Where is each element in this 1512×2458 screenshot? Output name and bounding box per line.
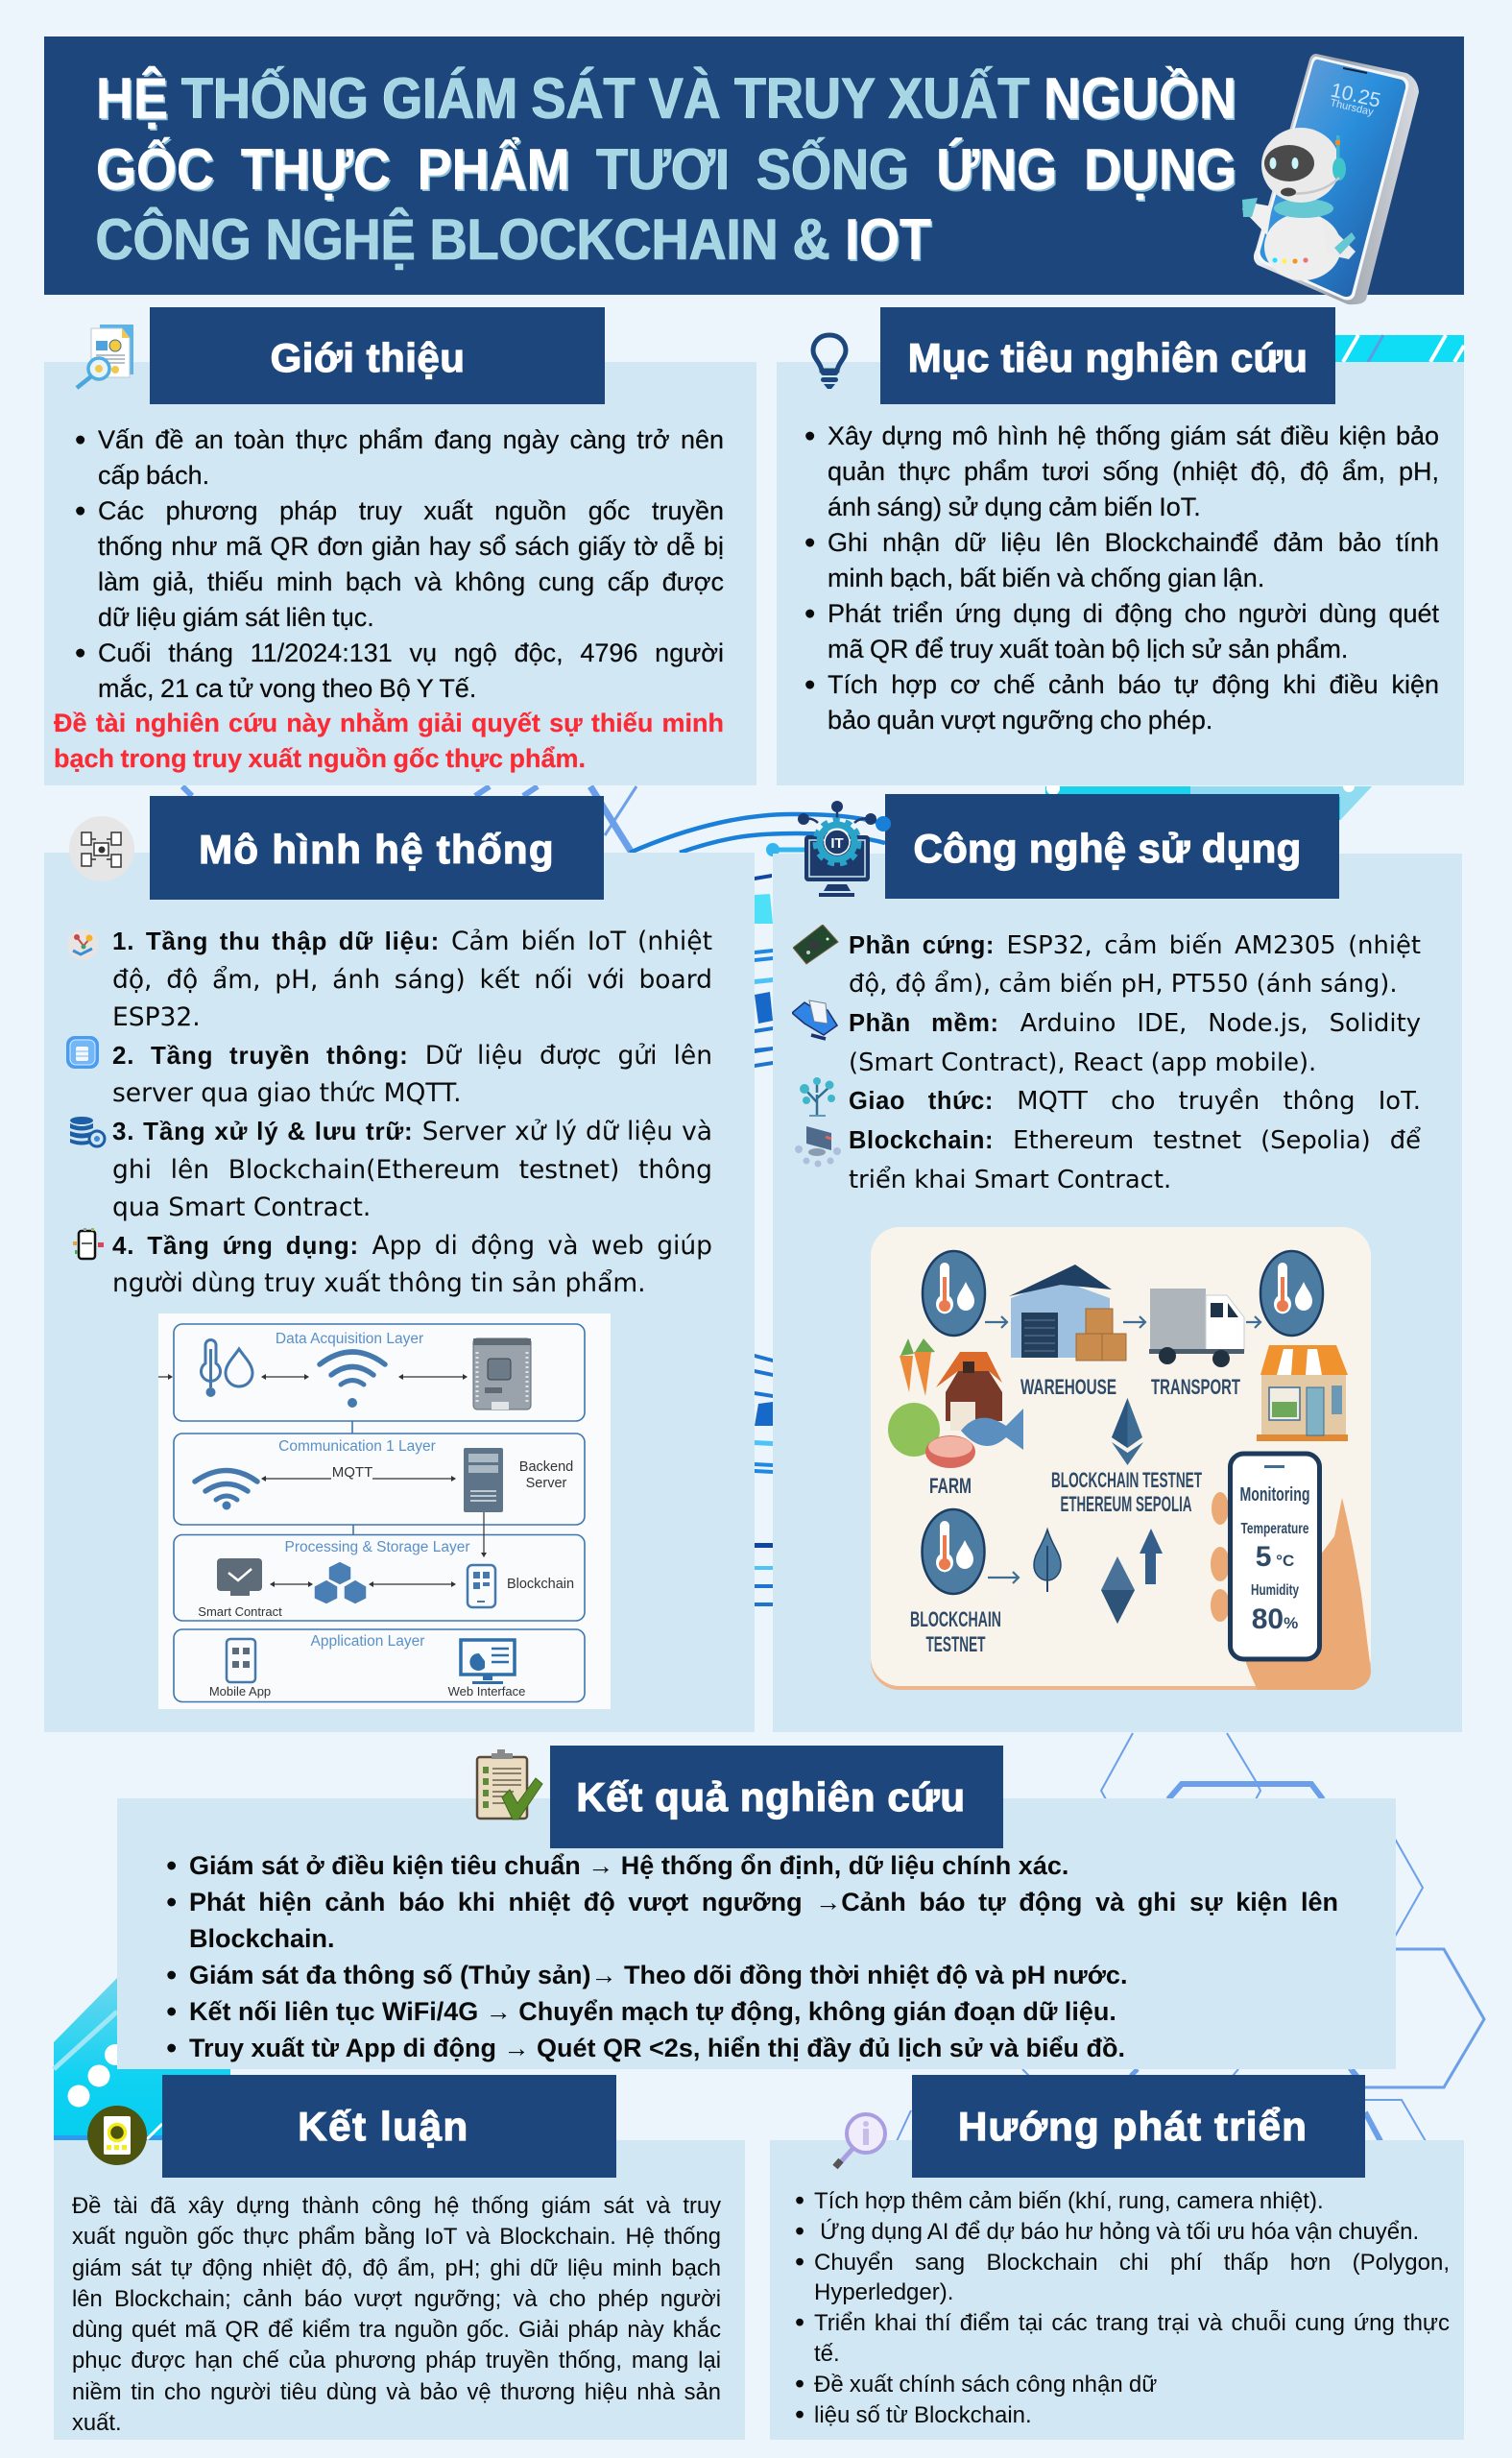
text: conclusion paragraph: lên Blockchain; cảnh báo vượt ngưỡng; và cho phép người (72, 2286, 721, 2312)
text: conclusion paragraph: Đề tài đã xây dựng thành công hệ thống giám sát và truy (72, 2193, 721, 2219)
panel: future development: • (795, 2247, 804, 2277)
callout: red statement (54, 709, 724, 773)
panel: research objectives: • (804, 595, 815, 630)
text: results bullets: Truy xuất từ App di động → Quét QR <2s, hiển thị đầy đủ lịch sử và biểu đồ. (189, 2034, 1125, 2062)
text: technologies: triển khai Smart Contract. (849, 1166, 1171, 1194)
chart: system architecture diagram: Data Acquisition Layer (276, 1331, 423, 1347)
text: objectives bullets: minh bạch, bất biến và chống gian lận. (828, 563, 1264, 591)
chart: farm-to-consumer monitoring illustration: FARM (929, 1474, 972, 1498)
text: future bullets: Đề xuất chính sách công nhận dữ (814, 2372, 1157, 2398)
text: introduction bullets: thống như mã QR đơn giản hay sổ sách giấy tờ dễ bị (98, 532, 724, 561)
chart: farm-to-consumer monitoring illustration: BLOCKCHAIN TESTNET (1051, 1468, 1202, 1492)
panel: research objectives: • (804, 524, 815, 559)
chart: farm-to-consumer monitoring illustration (871, 1227, 1371, 1690)
text: introduction bullets: Các phương pháp truy xuất nguồn gốc truyền (98, 495, 724, 524)
heading: Hướng phát triển (912, 2075, 1365, 2178)
panel: research results: • (166, 2031, 177, 2065)
heading: Công nghệ sử dụng: Công nghệ sử dụng (913, 826, 1302, 870)
chart: farm-to-consumer monitoring illustration: 5 °C (1256, 1541, 1294, 1573)
chart: farm-to-consumer monitoring illustration: Monitoring (1240, 1484, 1309, 1506)
text: future bullets (795, 2185, 1450, 2430)
title banner (44, 36, 1464, 295)
text: results bullets: Giám sát ở điều kiện tiêu chuẩn → Hệ thống ổn định, dữ liệu chính xác. (189, 1851, 1068, 1880)
text: introduction bullets: làm giả, thiếu minh bạch và không cung cấp được (98, 566, 724, 595)
text: future bullets: Chuyển sang Blockchain chi phí thấp hơn (Polygon, (814, 2250, 1450, 2276)
chart: system architecture diagram: Backend (519, 1459, 573, 1475)
icon: clipboard with check mark (476, 1749, 543, 1820)
panel: technology used (773, 794, 1462, 1732)
text: future bullets: Triển khai thí điểm tại các trang trại và chuỗi cung ứng thực (814, 2310, 1450, 2336)
heading: Giới thiệu (150, 307, 605, 404)
text: technologies (849, 931, 1421, 1194)
text: system layers: 3. Tầng xử lý & lưu trữ: Server xử lý dữ liệu và (112, 1117, 712, 1146)
title (96, 65, 1236, 272)
text: conclusion paragraph: dùng quét mã QR để kiểm tra nguồn gốc. Giải pháp này khắc (72, 2317, 721, 2343)
chart: system architecture diagram: Server (526, 1476, 567, 1491)
icon: protocol tree (800, 1077, 835, 1117)
chart: farm-to-consumer monitoring illustration: Humidity (1251, 1582, 1299, 1599)
text: technologies: Phần cứng: ESP32, cảm biến AM2305 (nhiệt (849, 931, 1421, 960)
icon: system nodes in grey circle (69, 816, 134, 881)
text: technologies: Phần mềm: Arduino IDE, Node.js, Solidity (849, 1009, 1421, 1038)
icon: hardware chip (793, 925, 839, 965)
chart: system architecture diagram: Mobile App (209, 1684, 271, 1699)
text: introduction bullets: Cuối tháng 11/2024:131 vụ ngộ độc, 4796 người (98, 638, 724, 666)
icon: light bulb (810, 332, 849, 389)
panel: research results: • (166, 1848, 177, 1883)
text: future bullets: Hyperledger). (814, 2279, 953, 2305)
panel: future development: • (795, 2185, 804, 2216)
chart: farm-to-consumer monitoring illustration: TESTNET (925, 1632, 986, 1656)
heading: Giới thiệu: Giới thiệu (271, 334, 465, 380)
chart: system architecture diagram: Application Layer (311, 1633, 424, 1650)
chart: farm-to-consumer monitoring illustration: WAREHOUSE (1020, 1375, 1116, 1399)
text: technologies: (Smart Contract), React (app mobile). (849, 1048, 1316, 1077)
text: future bullets: liệu số từ Blockchain. (814, 2402, 1032, 2428)
icon: layer 1 data collection (68, 929, 98, 960)
text: objectives bullets (804, 419, 1439, 735)
callout: red statement: Đề tài nghiên cứu này nhằm giải quyết sự thiếu minh (54, 709, 724, 737)
text: introduction bullets: cấp bách. (98, 461, 209, 490)
heading: Mô hình hệ thống (150, 796, 604, 900)
icon: robot emerging from phone: Thursday (1329, 97, 1375, 118)
panel: research results: • (166, 1885, 177, 1919)
text: future bullets: tế. (814, 2341, 840, 2367)
icon: IT monitor with gear (798, 801, 891, 897)
icon: software screen (792, 1000, 838, 1041)
panel: introduction: • (75, 422, 85, 457)
chart: system architecture diagram: Smart Contract (198, 1604, 282, 1619)
chart: system architecture diagram: Blockchain (507, 1577, 574, 1592)
heading: Mô hình hệ thống: Mô hình hệ thống (199, 827, 555, 872)
chart: system architecture diagram: Communication 1 Layer (278, 1438, 436, 1455)
text: technologies: độ, độ ẩm), cảm biến pH, PT550 (ánh sáng). (849, 970, 1398, 999)
panel: introduction: • (75, 636, 85, 670)
icon: layer 2 communication (66, 1036, 99, 1069)
chart: system architecture diagram: Processing & Storage Layer (284, 1539, 470, 1555)
chart: farm-to-consumer monitoring illustration: Temperature (1240, 1521, 1309, 1537)
heading: Công nghệ sử dụng (885, 794, 1339, 899)
heading: Kết luận: Kết luận (298, 2103, 469, 2149)
title: CÔNG NGHỆ BLOCKCHAIN & IOT (96, 207, 931, 272)
text: system layers (112, 927, 712, 1298)
heading: Kết quả nghiên cứu (550, 1746, 1003, 1848)
callout: red statement: bạch trong truy xuất nguồn gốc thực phẩm. (54, 744, 586, 773)
text: conclusion paragraph (72, 2193, 721, 2436)
text: conclusion paragraph: phục được hạn chế của phương pháp truyền thống, mang lại (72, 2348, 721, 2374)
panel: research results: • (166, 1958, 177, 1992)
title: HỆ THỐNG GIÁM SÁT VÀ TRUY XUẤT NGUỒN (96, 66, 1236, 131)
panel: system model (44, 796, 755, 1732)
text: results bullets (166, 1848, 1338, 2065)
panel: research objectives (777, 307, 1464, 785)
text: future bullets: Tích hợp thêm cảm biến (khí, rung, camera nhiệt). (814, 2188, 1324, 2214)
text: results bullets: Kết nối liên tục WiFi/4G → Chuyển mạch tự động, không gián đoạn dữ liệu. (189, 1997, 1116, 2026)
chart: system architecture diagram: MQTT (332, 1464, 372, 1481)
chart: farm-to-consumer monitoring illustration: ETHEREUM SEPOLIA (1060, 1492, 1192, 1516)
heading: Mục tiêu nghiên cứu: Mục tiêu nghiên cứu (908, 334, 1308, 380)
heading: Hướng phát triển: Hướng phát triển (958, 2103, 1308, 2149)
icon: blockchain server (795, 1126, 841, 1168)
panel: introduction (44, 307, 756, 785)
chart: farm-to-consumer monitoring illustration: 80% (1252, 1603, 1298, 1635)
text: system layers: qua Smart Contract. (112, 1193, 371, 1222)
heading: Mục tiêu nghiên cứu (880, 307, 1335, 404)
text: system layers: ghi lên Blockchain(Ethereum testnet) thông (112, 1155, 712, 1185)
text: introduction bullets (75, 422, 724, 703)
text: introduction bullets: Vấn đề an toàn thực phẩm đang ngày càng trở nên (98, 424, 724, 453)
icon: robot emerging from phone: 10.25 (1329, 79, 1382, 112)
text: conclusion paragraph: giám sát tự động nhiệt độ, độ ẩm, pH; ghi dữ liệu minh bạch (72, 2255, 721, 2281)
panel: conclusion (54, 2075, 745, 2440)
panel: research objectives: • (804, 419, 815, 453)
text: system layers: server qua giao thức MQTT. (112, 1078, 462, 1108)
panel: future development: • (795, 2216, 804, 2247)
text: conclusion paragraph: xuất. (72, 2410, 122, 2436)
panel: future development: • (795, 2399, 804, 2430)
icon: layer 3 database (70, 1117, 106, 1148)
icon: IT monitor with gear: IT (830, 835, 844, 852)
panel: introduction: • (75, 494, 85, 528)
icon: document with magnifier (75, 325, 133, 390)
text: results bullets: Giám sát đa thông số (Thủy sản)→ Theo dõi đồng thời nhiệt độ và pH nước. (189, 1961, 1127, 1989)
panel: future development: • (795, 2307, 804, 2338)
text: technologies: Blockchain: Ethereum testnet (Sepolia) để (849, 1126, 1421, 1155)
icon: robot emerging from phone (1242, 54, 1419, 305)
text: introduction bullets: mắc, 21 ca tử vong theo Bộ Y Tế. (98, 674, 476, 703)
text: system layers: người dùng truy xuất thông tin sản phẩm. (112, 1268, 646, 1298)
text: results bullets: Phát hiện cảnh báo khi nhiệt độ vượt ngưỡng →Cảnh báo tự động và ghi sự kiện lên (189, 1888, 1338, 1916)
title: GỐC THỰC PHẨM TƯƠI SỐNG ỨNG DỤNG (96, 136, 1236, 202)
text: system layers: độ, độ ẩm, pH, ánh sáng) kết nối với board (112, 965, 712, 995)
chart: farm-to-consumer monitoring illustration: BLOCKCHAIN (910, 1607, 1001, 1631)
heading: Kết luận (162, 2075, 616, 2178)
text: objectives bullets: Phát triển ứng dụng di động cho người dùng quét (828, 599, 1439, 628)
chart: farm-to-consumer monitoring illustration: TRANSPORT (1151, 1375, 1240, 1399)
icon: olive circle with phone (87, 2106, 147, 2165)
heading: Kết quả nghiên cứu: Kết quả nghiên cứu (576, 1774, 966, 1819)
text: system layers: 2. Tầng truyền thông: Dữ liệu được gửi lên (112, 1041, 712, 1071)
text: objectives bullets: mã QR để truy xuất toàn bộ lịch sử sản phẩm. (828, 634, 1348, 663)
text: future bullets: Ứng dụng AI để dự báo hư hỏng và tối ưu hóa vận chuyển. (820, 2219, 1419, 2245)
text: system layers: 4. Tầng ứng dụng: App di động và web giúp (112, 1231, 712, 1261)
text: objectives bullets: bảo quản vượt ngưỡng cho phép. (828, 705, 1212, 734)
panel: research results: • (166, 1994, 177, 2029)
chart: system architecture diagram: Web Interface (448, 1684, 525, 1699)
panel: research results (117, 1746, 1396, 2069)
text: objectives bullets: Xây dựng mô hình hệ thống giám sát điều kiện bảo (828, 421, 1439, 449)
text: conclusion paragraph: xuất nguồn gốc thực phẩm bằng IoT và Blockchain. Hệ thống (72, 2224, 721, 2250)
text: objectives bullets: Tích hợp cơ chế cảnh báo tự động khi điều kiện (828, 670, 1439, 699)
icon: layer 4 application (73, 1228, 104, 1260)
panel: research objectives: • (804, 666, 815, 701)
text: objectives bullets: Ghi nhận dữ liệu lên Blockchainđể đảm bảo tính (828, 528, 1439, 557)
text: results bullets: Blockchain. (189, 1924, 335, 1953)
text: introduction bullets: dữ liệu giám sát liên tục. (98, 603, 374, 632)
icon: magnifier with info symbol (832, 2112, 887, 2170)
text: system layers: ESP32. (112, 1002, 201, 1032)
chart: system architecture diagram (158, 1313, 611, 1709)
panel: future development: • (795, 2369, 804, 2399)
text: conclusion paragraph: niềm tin cho người tiêu dùng và bảo vệ thương hiệu nhà sản (72, 2379, 721, 2405)
text: objectives bullets: quản thực phẩm tươi sống (nhiệt độ, độ ẩm, pH, (828, 457, 1439, 486)
text: technologies: Giao thức: MQTT cho truyền thông IoT. (849, 1087, 1421, 1116)
text: system layers: 1. Tầng thu thập dữ liệu: Cảm biến IoT (nhiệt (112, 927, 712, 956)
panel: future development (770, 2075, 1464, 2440)
text: objectives bullets: ánh sáng) sử dụng cảm biến IoT. (828, 492, 1201, 520)
